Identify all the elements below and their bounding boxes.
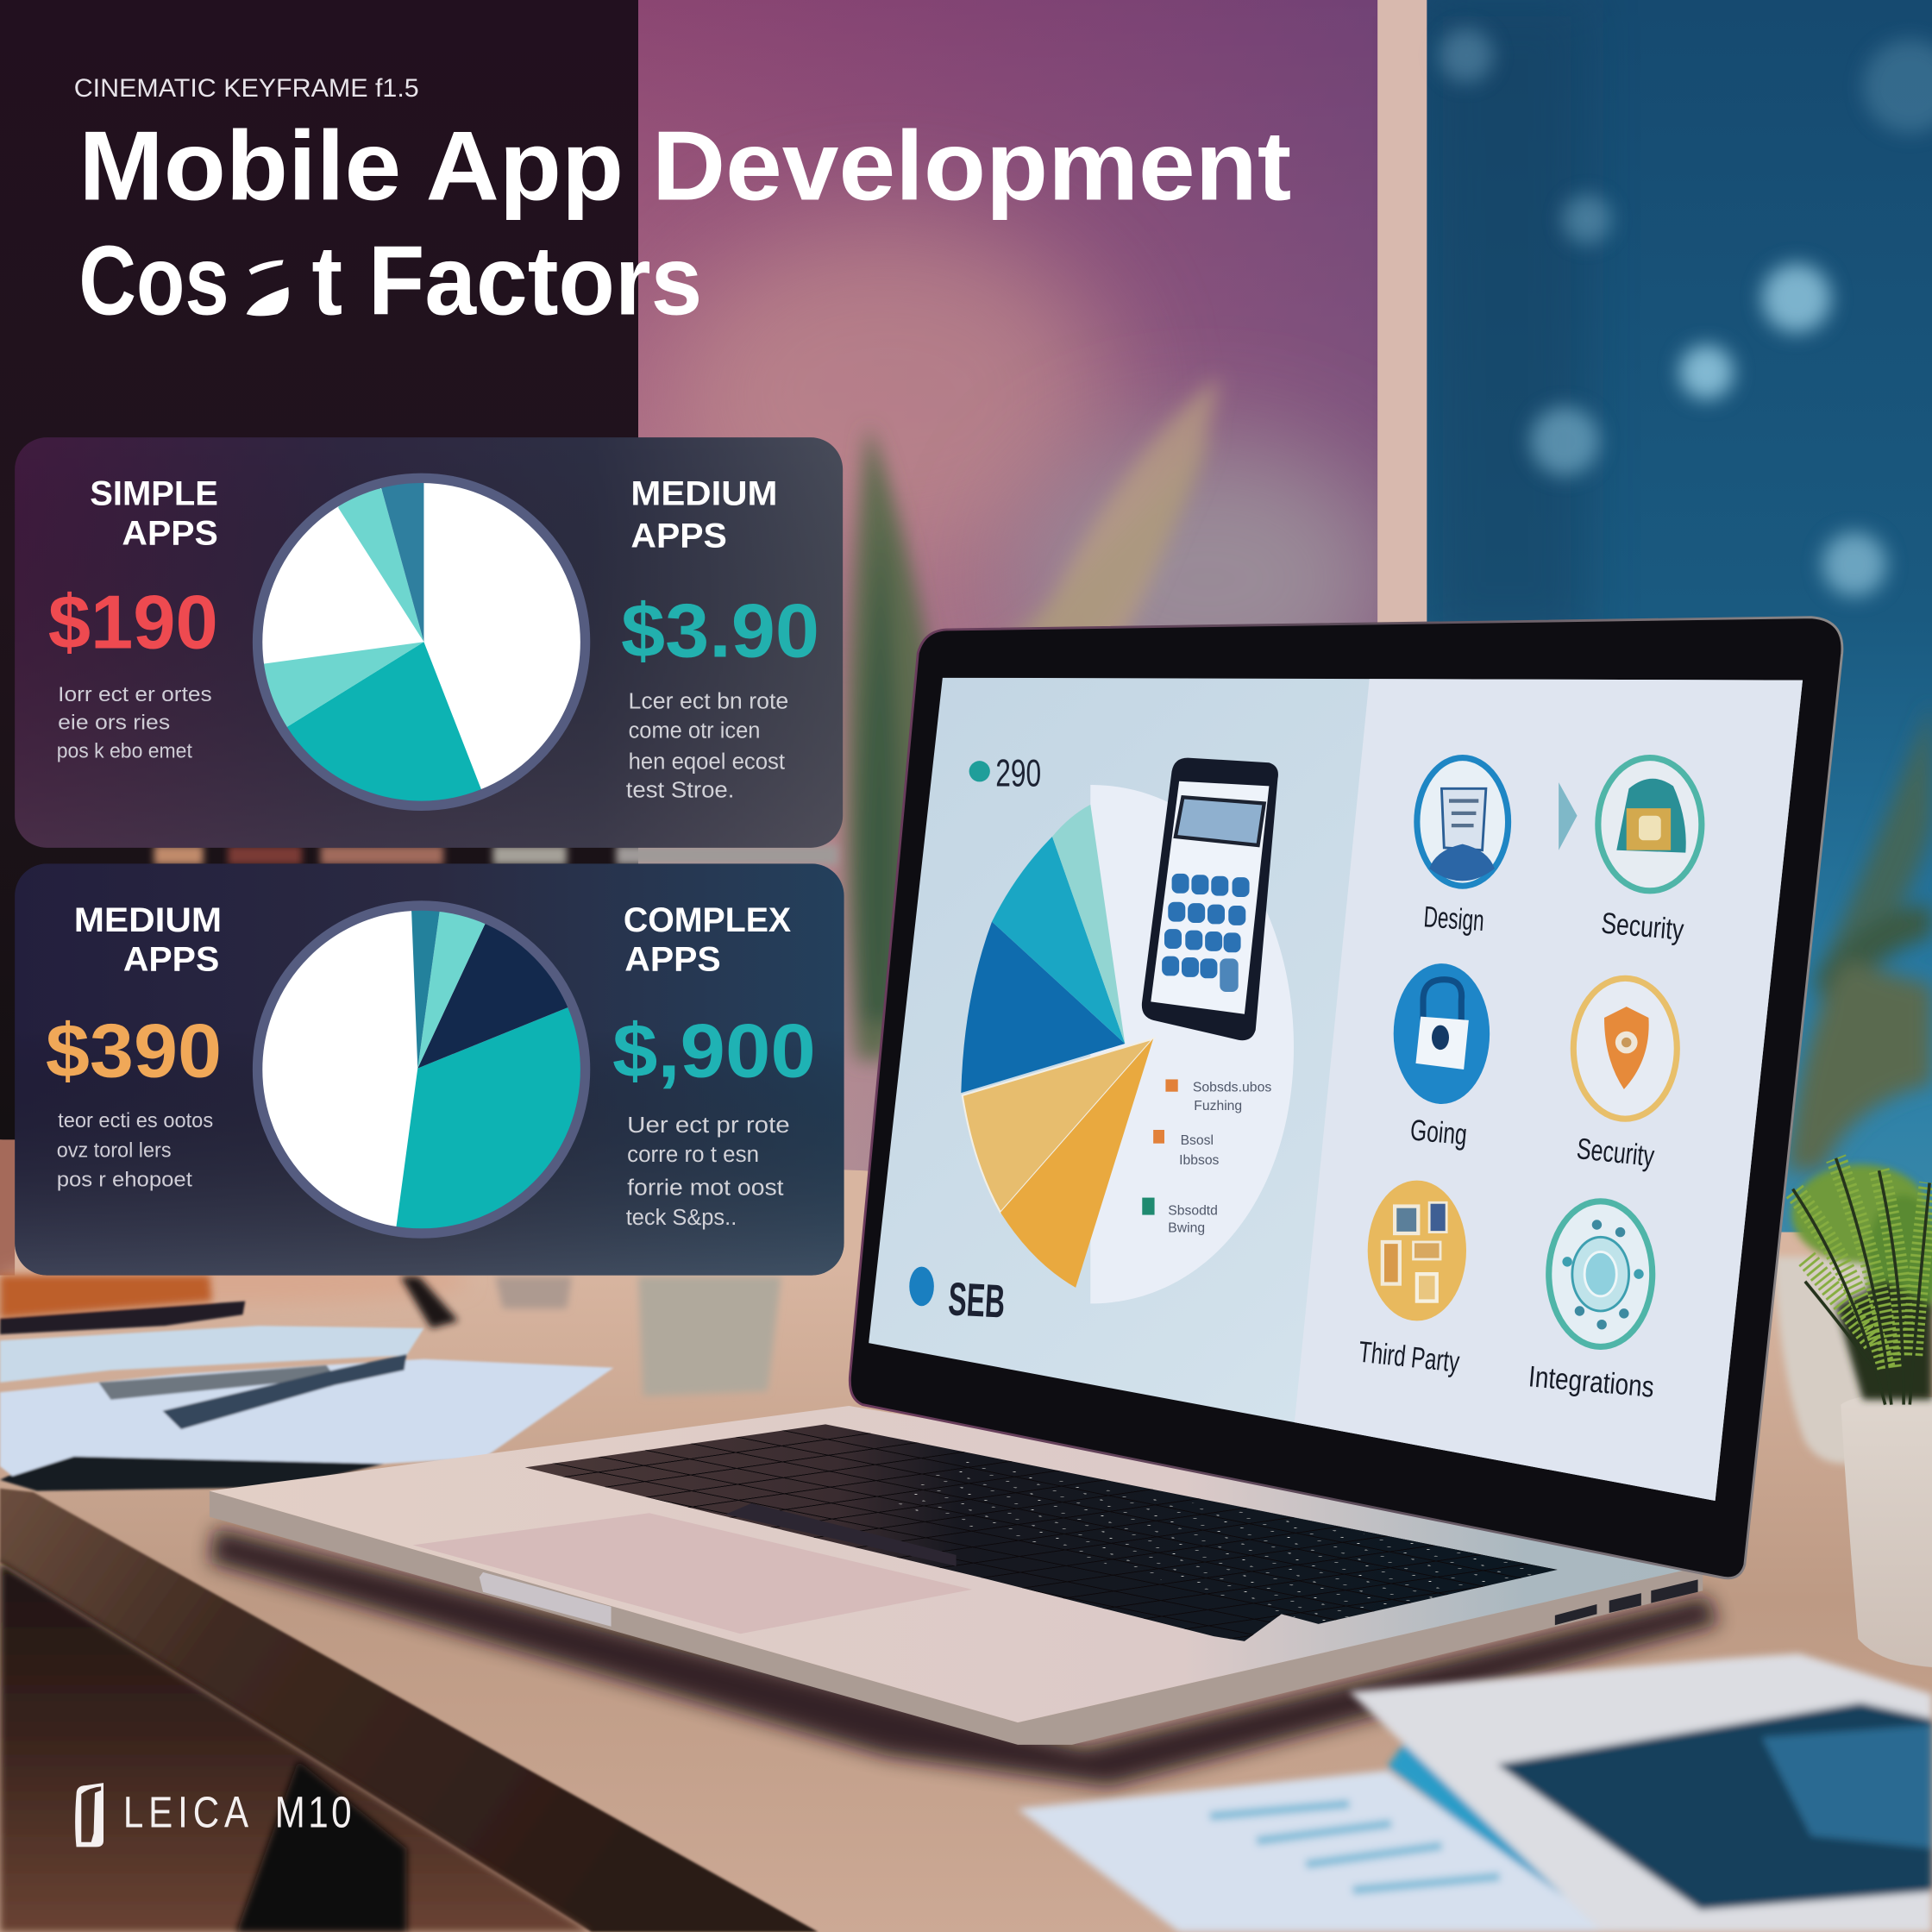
description: medium apps: pos r ehopoet (57, 1169, 192, 1192)
right pot behind (1774, 1257, 1872, 1464)
laptop shadow on desk (210, 1527, 1719, 1786)
title: Cos (78, 226, 229, 336)
icon: security badge (1598, 758, 1702, 891)
description: simple apps: Iorr ect er ortes (58, 683, 212, 706)
heading: medium apps: MEDIUM (630, 475, 777, 513)
description: medium apps: teor ecti es ootos (58, 1109, 213, 1132)
laptop screen (862, 672, 1811, 1509)
logo: Leica M10 (75, 1783, 354, 1847)
screen legend: Bsosl (1181, 1133, 1214, 1148)
keyboard (525, 1424, 1558, 1641)
icon: coding lock (1394, 963, 1490, 1104)
description: medium apps: hen eqoel ecost (629, 750, 785, 774)
screen legend: Sobsds.ubos (1193, 1081, 1271, 1095)
laptop lid frame (850, 618, 1842, 1578)
laptop base front face (210, 1491, 1703, 1745)
description: medium apps (57, 1109, 213, 1192)
price: complex apps: $,900 (612, 1008, 816, 1094)
arrow (1559, 782, 1578, 850)
icon: design (1417, 758, 1509, 886)
laptop ports (1555, 1579, 1698, 1625)
right background leaves (1786, 702, 1932, 1170)
description: complex apps (626, 1113, 790, 1230)
screen value SEB: SEB (947, 1272, 1007, 1328)
description: medium apps: come otr icen (629, 719, 760, 743)
icon labels: Design (1422, 900, 1485, 938)
desk front edge (0, 1489, 819, 1932)
screen legend: Bwing (1168, 1221, 1205, 1236)
heading: medium apps (630, 475, 777, 555)
trackpad (413, 1513, 972, 1634)
screen legend: Ibbsos (1179, 1153, 1220, 1168)
description: complex apps: Uer ect pr rote (627, 1113, 790, 1138)
heading: medium apps (74, 901, 222, 979)
heading: complex apps: COMPLEX (624, 901, 791, 939)
screen legend: Sbsodtd (1168, 1204, 1218, 1219)
background plant (847, 376, 1220, 1060)
model name: M10 (275, 1787, 354, 1837)
price: simple apps: $190 (48, 579, 218, 664)
icon: security shield (1573, 978, 1677, 1119)
icon: logo mark (75, 1783, 104, 1847)
pie chart: simple apps (222, 456, 604, 862)
base notch (480, 1572, 612, 1627)
screen pie chart (961, 785, 1294, 1303)
desk plant and pot (1791, 1158, 1932, 1667)
notebook and pen on desk (0, 1276, 613, 1491)
description: medium apps: Lcer ect bn rote (629, 689, 788, 713)
heading: simple apps (90, 475, 218, 552)
wordmark: LEICA (123, 1787, 254, 1837)
heading: simple apps: APPS (122, 514, 218, 552)
icon labels: Security (1600, 907, 1685, 947)
chair silhouette (236, 1760, 406, 1932)
heading: medium apps: MEDIUM (74, 901, 222, 939)
eyebrow caption: CINEMATIC KEYFRAME f1.5 (74, 74, 419, 103)
pot (1841, 1395, 1932, 1667)
price: medium apps: $390 (46, 1008, 222, 1094)
panel: medium and complex apps (15, 863, 844, 1276)
description: medium apps: ovz torol lers (57, 1138, 172, 1162)
laptop base (210, 1406, 1703, 1722)
screen phone calculator (1142, 758, 1278, 1040)
title (78, 111, 1291, 336)
heading: medium apps: APPS (123, 941, 219, 979)
desk surface (0, 1139, 1932, 1932)
description: complex apps: corre ro t esn (627, 1143, 759, 1167)
title: Mobile App Development (78, 111, 1291, 221)
pie chart: medium apps (247, 894, 604, 1257)
cup (638, 1276, 781, 1396)
price: medium apps: $3.90 (621, 587, 819, 673)
description: medium apps (626, 689, 788, 802)
description: medium apps: test Stroe. (626, 778, 734, 802)
heading: complex apps: APPS (624, 941, 721, 979)
gap bokeh strip between panels (154, 845, 837, 865)
heading: medium apps: APPS (630, 517, 727, 555)
icon labels: Integrations (1527, 1360, 1655, 1404)
foliage (1791, 1158, 1932, 1405)
screen value SEB (909, 1266, 1004, 1318)
description: simple apps: pos k ebo emet (57, 740, 192, 763)
screen legend: Fuzhing (1194, 1099, 1242, 1113)
icon labels: Going (1409, 1114, 1468, 1151)
heading: complex apps (624, 901, 791, 979)
icon labels: Security (1575, 1132, 1656, 1173)
description: complex apps: teck S&ps.. (626, 1206, 737, 1230)
laptop (210, 618, 1842, 1745)
description: complex apps: forrie mot oost (627, 1176, 784, 1201)
description: simple apps: eie ors ries (58, 712, 170, 735)
screen value 290: 290 (995, 752, 1041, 794)
icon labels: Third Party (1357, 1336, 1462, 1379)
description: simple apps (57, 683, 212, 763)
papers and tablet foreground (1018, 1653, 1932, 1932)
icon: third party (1368, 1181, 1466, 1320)
screen legend (1142, 1079, 1271, 1236)
title: t Factors (311, 226, 702, 336)
screen value 290 (969, 759, 1040, 787)
icon labels (1357, 900, 1685, 1404)
heading: simple apps: SIMPLE (90, 475, 218, 513)
icon: integrations (1549, 1201, 1653, 1346)
panel: simple and medium apps (15, 437, 843, 862)
